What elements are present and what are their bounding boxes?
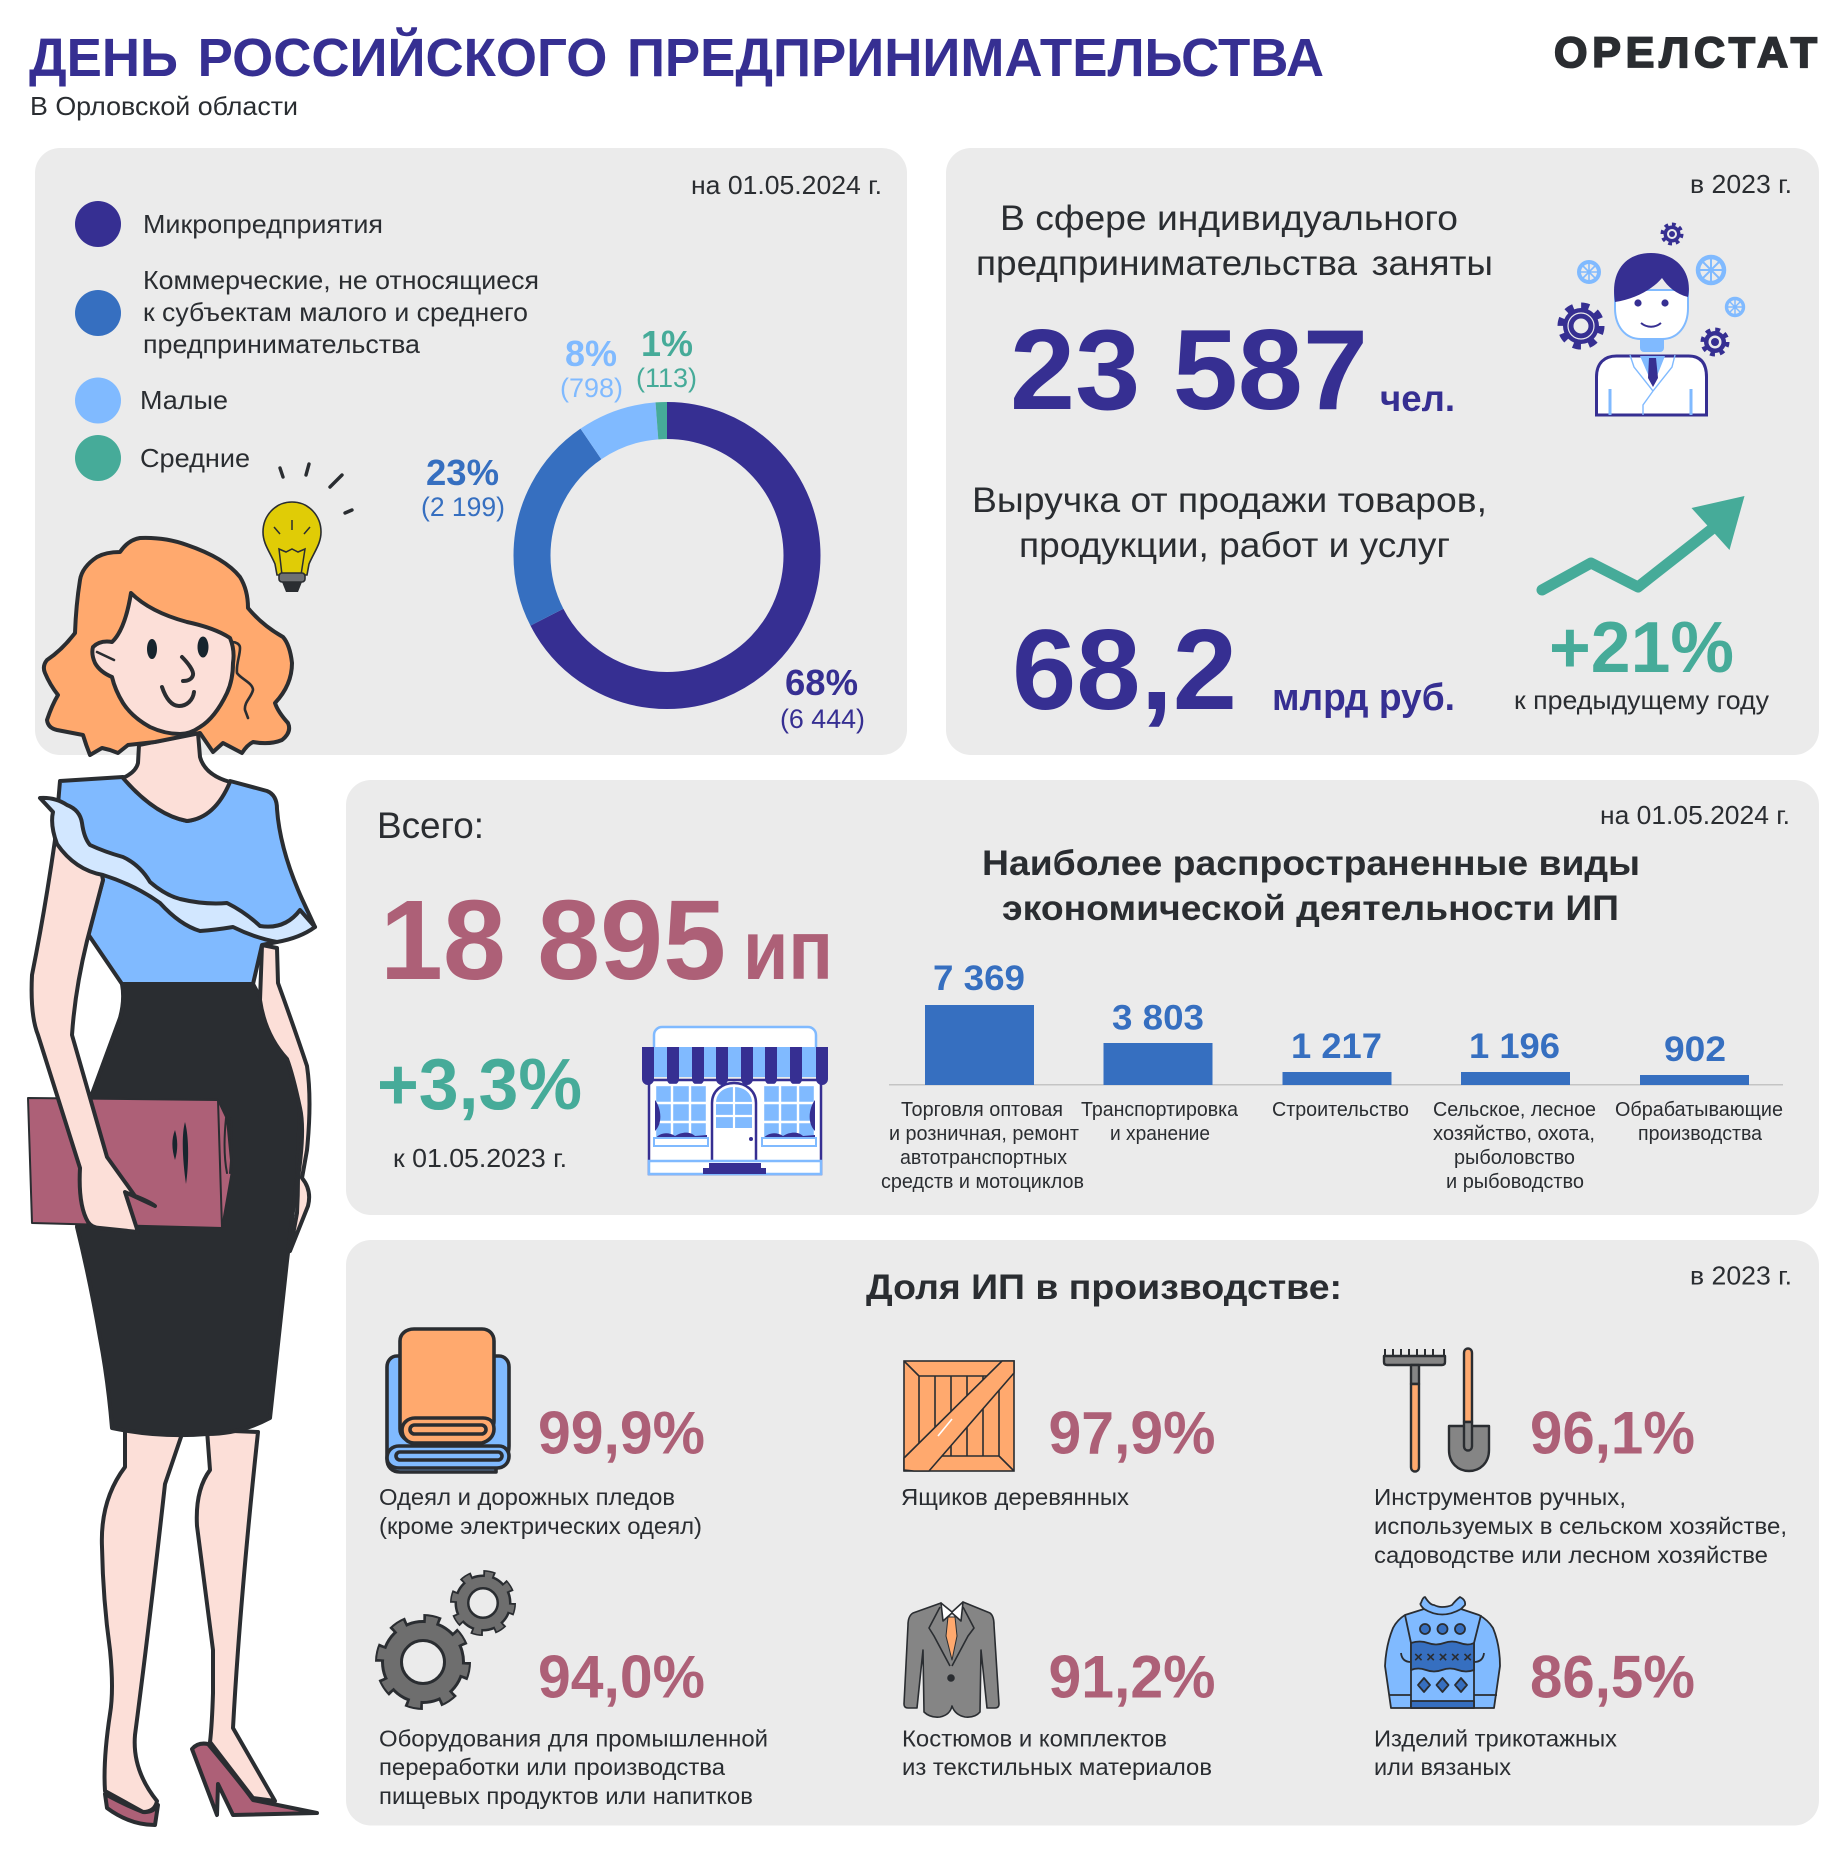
caption: Костюмов и комплектов bbox=[902, 1726, 1167, 1752]
knit crosses: ××××× bbox=[1414, 1649, 1472, 1666]
legs bbox=[102, 1430, 275, 1812]
donut labels: (2 199) bbox=[421, 492, 505, 522]
item: hand tools bbox=[1374, 1348, 1787, 1568]
illustration: woman with folder bbox=[28, 538, 317, 1825]
donut labels: (6 444) bbox=[780, 704, 865, 734]
shirt bbox=[55, 777, 315, 984]
donut labels: (113) bbox=[636, 363, 697, 393]
item: suits bbox=[902, 1602, 1216, 1780]
bar: agriculture: хозяйство, охота, bbox=[1433, 1123, 1595, 1145]
caption bbox=[902, 1726, 1212, 1780]
legend: предпринимательства bbox=[143, 329, 421, 359]
bar: agriculture: 1 196 bbox=[1469, 1027, 1560, 1066]
revenue value: 68,2 bbox=[1012, 607, 1237, 734]
icon: gears bbox=[382, 1575, 511, 1703]
icon: growth arrow bbox=[1542, 496, 1744, 590]
bar: trade: автотранспортных bbox=[900, 1147, 1067, 1169]
percent: 86,5% bbox=[1530, 1644, 1695, 1710]
legend: Коммерческие, не относящиеся bbox=[143, 265, 539, 295]
icon: suit bbox=[904, 1602, 999, 1717]
right arm bbox=[260, 945, 310, 1251]
caption: Оборудования для промышленной bbox=[379, 1726, 768, 1752]
bar: transport bbox=[1081, 998, 1239, 1145]
caption: Одеял и дорожных пледов bbox=[379, 1484, 675, 1510]
bar: transport: 3 803 bbox=[1112, 998, 1204, 1038]
title: ДЕНЬ РОССИЙСКОГО ПРЕДПРИНИМАТЕЛЬСТВА bbox=[29, 27, 1324, 88]
donut labels: 68% bbox=[785, 662, 858, 703]
subtitle: В Орловской области bbox=[30, 91, 298, 121]
percent: 96,1% bbox=[1530, 1400, 1695, 1466]
bar: transport: Транспортировка bbox=[1081, 1099, 1239, 1121]
bar: agriculture: рыболовство bbox=[1454, 1147, 1575, 1169]
icon: man with gears bbox=[1562, 224, 1744, 415]
bar: agriculture: Сельское, лесное bbox=[1433, 1099, 1596, 1121]
employment text line 2: предпринимательства заняты bbox=[976, 244, 1493, 283]
left arm and hand bbox=[32, 840, 155, 1232]
legend bbox=[75, 201, 539, 481]
panel: employment and revenue bbox=[946, 148, 1819, 755]
caption: или вязаных bbox=[1374, 1754, 1511, 1780]
growth caption: к предыдущему году bbox=[1514, 685, 1769, 715]
revenue unit: млрд руб. bbox=[1272, 677, 1455, 719]
icon: sweater bbox=[1385, 1597, 1500, 1708]
bar: trade: и розничная, ремонт bbox=[889, 1123, 1079, 1145]
year label: в 2023 г. bbox=[1690, 169, 1792, 199]
bar: agriculture bbox=[1433, 1027, 1596, 1193]
bar: manufacturing bbox=[1615, 1030, 1783, 1145]
caption bbox=[1374, 1484, 1787, 1568]
bar: manufacturing: производства bbox=[1638, 1123, 1763, 1145]
caption: (кроме электрических одеял) bbox=[379, 1513, 702, 1539]
folder bbox=[28, 1098, 232, 1228]
caption: садоводстве или лесном хозяйстве bbox=[1374, 1542, 1768, 1568]
item: blankets bbox=[379, 1329, 705, 1539]
donut labels: 23% bbox=[426, 452, 499, 493]
shoes bbox=[105, 1744, 317, 1825]
caption: Ящиков деревянных bbox=[901, 1484, 1129, 1510]
growth percent: +21% bbox=[1549, 608, 1734, 688]
unit: чел. bbox=[1380, 378, 1455, 419]
donut labels: 8% bbox=[565, 333, 617, 374]
ear line and curl bbox=[97, 642, 253, 718]
panel: structure of enterprises bbox=[35, 148, 907, 755]
eyes and mouth bbox=[147, 636, 208, 706]
bar: trade bbox=[881, 959, 1084, 1193]
donut labels: 1% bbox=[641, 323, 693, 364]
bar: manufacturing: Обрабатывающие bbox=[1615, 1099, 1783, 1121]
item: knitwear bbox=[1374, 1597, 1695, 1780]
change caption: к 01.05.2023 г. bbox=[393, 1143, 567, 1173]
donut labels bbox=[421, 323, 865, 734]
date label: на 01.05.2024 г. bbox=[1600, 800, 1790, 830]
donut chart bbox=[532, 420, 802, 690]
caption: пищевых продуктов или напитков bbox=[379, 1783, 753, 1809]
change percent: +3,3% bbox=[377, 1045, 582, 1125]
percent: 97,9% bbox=[1048, 1400, 1216, 1466]
donut labels: (798) bbox=[560, 373, 623, 403]
caption bbox=[1374, 1726, 1617, 1780]
face bbox=[92, 593, 234, 734]
heading: Доля ИП в производстве: bbox=[866, 1268, 1342, 1307]
heading line 2: экономической деятельности ИП bbox=[1002, 889, 1619, 928]
employed count: 23 587 bbox=[1010, 307, 1368, 434]
caption bbox=[379, 1726, 768, 1809]
legend: Микропредприятия bbox=[143, 209, 383, 239]
ruffle bbox=[40, 798, 315, 942]
logo: Орелстат: ОРЕЛСТАТ bbox=[1554, 29, 1817, 77]
percent: 91,2% bbox=[1048, 1644, 1216, 1710]
bar: transport: и хранение bbox=[1110, 1123, 1210, 1145]
hair bbox=[44, 538, 292, 755]
panel: total and activity types bbox=[346, 780, 1819, 1215]
icon: light bulb bbox=[263, 464, 352, 592]
caption: используемых в сельском хозяйстве, bbox=[1374, 1513, 1787, 1539]
revenue text: Выручка от продажи товаров, bbox=[972, 481, 1487, 520]
bar: manufacturing: 902 bbox=[1664, 1030, 1726, 1069]
caption: переработки или производства bbox=[379, 1754, 726, 1780]
icon: blanket bbox=[387, 1329, 509, 1472]
bar: construction bbox=[1272, 1027, 1409, 1121]
legend: Малые bbox=[140, 385, 228, 415]
year label: в 2023 г. bbox=[1690, 1260, 1792, 1290]
percent: 99,9% bbox=[538, 1400, 705, 1466]
caption: из текстильных материалов bbox=[902, 1754, 1212, 1780]
bar chart bbox=[881, 959, 1783, 1193]
heading: activity types: Наиболее распространенные виды bbox=[982, 844, 1640, 883]
bar: trade: 7 369 bbox=[933, 959, 1025, 998]
bar: construction: 1 217 bbox=[1291, 1027, 1382, 1066]
total label: Всего: bbox=[377, 805, 484, 846]
percent: 94,0% bbox=[538, 1644, 705, 1710]
skirt bbox=[77, 984, 300, 1435]
bar: construction: Строительство bbox=[1272, 1099, 1409, 1121]
total unit: ип bbox=[743, 903, 833, 997]
icon: shop bbox=[642, 1027, 828, 1174]
legend: к субъектам малого и среднего bbox=[143, 297, 528, 327]
caption: Инструментов ручных, bbox=[1374, 1484, 1626, 1510]
employment text: В сфере индивидуального bbox=[1000, 199, 1458, 238]
total value: 18 895 bbox=[380, 877, 726, 1003]
date label: на 01.05.2024 г. bbox=[691, 170, 882, 200]
panel: share in production bbox=[346, 1240, 1819, 1826]
caption: Изделий трикотажных bbox=[1374, 1726, 1617, 1752]
item: equipment bbox=[379, 1575, 768, 1809]
revenue text line 2: продукции, работ и услуг bbox=[1019, 526, 1450, 565]
item: crates bbox=[901, 1361, 1216, 1510]
icon: crate bbox=[904, 1361, 1014, 1471]
icon: rake and shovel bbox=[1384, 1348, 1489, 1472]
bar: trade: средств и мотоциклов bbox=[881, 1171, 1084, 1193]
bar: agriculture: и рыбоводство bbox=[1446, 1171, 1584, 1193]
caption bbox=[379, 1484, 702, 1539]
neck bbox=[123, 733, 230, 821]
legend: Средние bbox=[140, 443, 250, 473]
bar: trade: Торговля оптовая bbox=[901, 1099, 1063, 1121]
